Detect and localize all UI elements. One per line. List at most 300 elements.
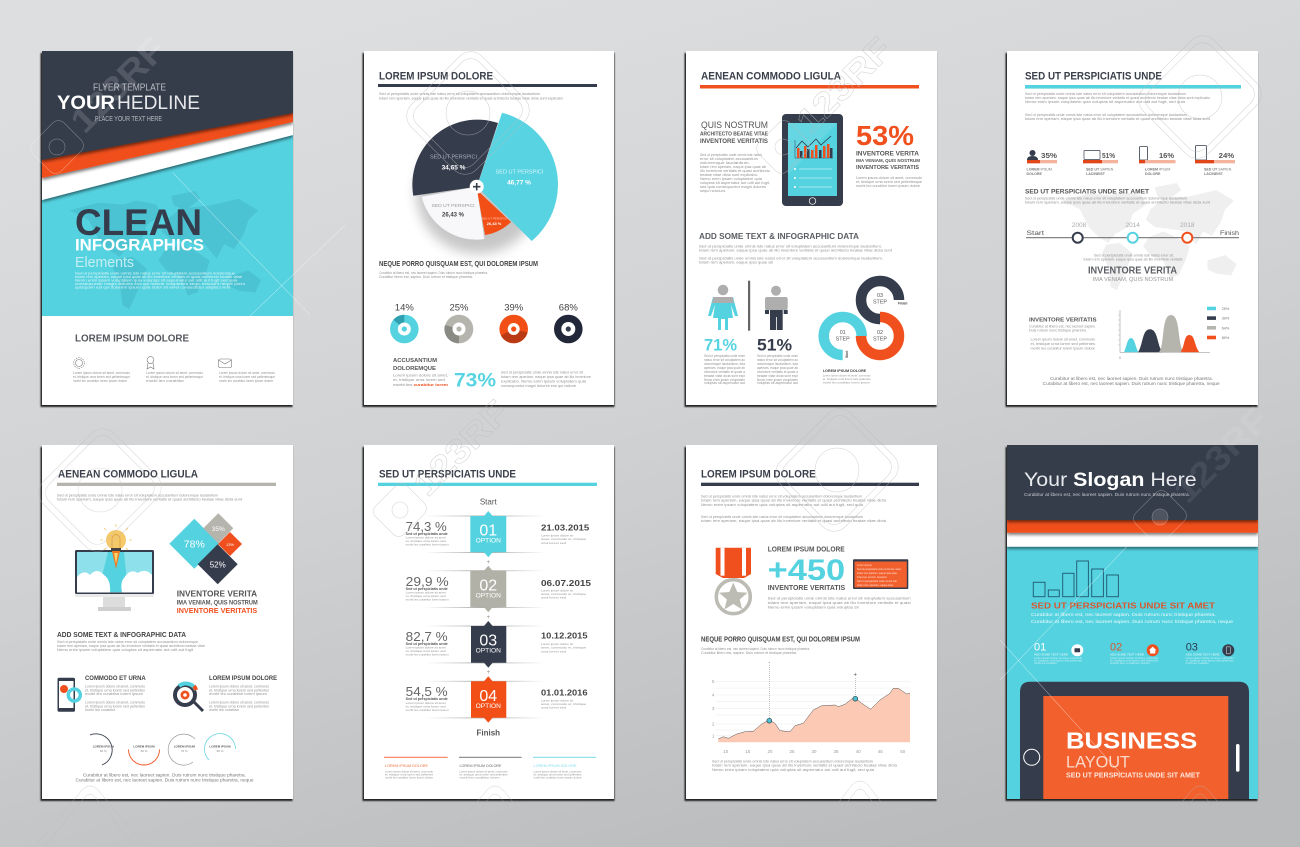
connector plus: +	[487, 670, 491, 676]
option 01 row: OPTION	[476, 538, 501, 545]
51 percent: 51%	[757, 336, 792, 355]
donut 25%: 25%	[449, 303, 469, 314]
step 01: morbi leo curabitur	[1034, 662, 1057, 665]
left copy: sequi nesciunt.	[700, 189, 726, 193]
watermarks: 123RF	[789, 30, 900, 141]
timeline caption: Sed ut perspiciatis unde omnis iste natus error sit,	[1094, 254, 1174, 258]
steps caption: LOREM IPSUM DOLORE	[823, 369, 867, 373]
world map	[1062, 183, 1237, 290]
donut 14%	[390, 303, 419, 343]
footer columns text: et, tristique uma lorem sed pellentesque	[146, 375, 203, 379]
accusantium block: Lorem ipsum dolore sit amet,	[393, 374, 448, 378]
right copy: INVENTORE VERITATIS	[856, 165, 919, 171]
icon: laptop screen: totam rem aperiam, eaque ipsa	[857, 583, 894, 587]
panel: tablet and steps page	[686, 51, 937, 405]
option 01 row: Lorem ipsum dolore sit amet	[406, 536, 446, 540]
left copy: sed quia consequuntur magni dolores	[700, 185, 766, 189]
intro text	[75, 272, 245, 290]
commodo block: COMMODO ET URNA	[85, 676, 146, 682]
option 01 row: et, tristique urna lorem sed	[406, 539, 446, 543]
option 01 row: Sed ut perspiciatis unde	[406, 532, 448, 536]
watermarks: 123RF	[1166, 400, 1277, 511]
option 04 row: uma lorem sed	[541, 706, 566, 710]
area line chart: 4	[712, 692, 715, 698]
chart copy: Lorem ipsum dolore sit amet, commodo	[1030, 338, 1095, 342]
accusantium block: DOLOREMQUE	[393, 366, 436, 372]
footer text: Curabitur at libero est, nec laoreet sapien. Duis rutrum nunc tristique pharetra, neque	[76, 778, 254, 782]
intro text: Sed ut perspiciatis unde omnis iste natus error sit voluptatem accusantium doloremque laudantium	[1025, 92, 1186, 96]
accusantium right text: totam rem aperiam, eaque ipsa quae ab illo inventore	[501, 375, 591, 379]
right copy: INVENTORE VERITA	[856, 151, 919, 158]
stat: tablet 24%	[1195, 146, 1235, 176]
icon: male figure	[765, 286, 788, 330]
right copy: IMA VENIAM, QUIS NOSTRUM	[856, 158, 920, 163]
area line chart	[712, 660, 910, 754]
71 percent: 71%	[704, 336, 737, 355]
option 01 row: morbi leo curabitur lorem ipsum	[406, 543, 449, 547]
footer column: orange: Lorem ipsum dolore sit amet, commodo	[385, 770, 433, 774]
timeline caption	[1084, 254, 1183, 283]
heading: SED UT PERSPICIATIS UNDE	[1025, 70, 1162, 82]
option 04 row: Lorem ipsum dolore sit	[541, 698, 573, 702]
73 percent: 73%	[454, 371, 496, 392]
figure captions: doloremque laudantium, tota	[704, 362, 745, 366]
footer column: gray: Lorem ipsum dolore sit amet, commodo	[460, 770, 508, 774]
intro text: totam rem aperiam, eaque ipsa quae ab illo inventore veritatis et quasi architecto beatae vitae	[75, 275, 242, 279]
section text	[57, 640, 205, 652]
step 02: ADD SOME TEXT HERE	[1110, 652, 1144, 656]
option 04 row	[406, 676, 588, 723]
tagline: PLACE YOUR TEXT HERE	[95, 116, 162, 123]
icon: laptop screen: Sed ut perspiciatis unde omnis iste	[857, 579, 898, 583]
option 02 row: 06.07.2015	[541, 579, 592, 588]
icon: laptop screen	[853, 559, 908, 589]
icon: laptop screen: Nemo enim ipsam	[857, 575, 887, 579]
left copy: QUIS NOSTRUM	[701, 120, 768, 130]
right copy: morbi leo curabitur lorem ipsum dolore	[856, 184, 920, 188]
icon: medal	[716, 548, 751, 614]
chart legend: 25%	[1222, 307, 1230, 311]
footer text: Curabitur at libero est, nec laoreet sapien. Duis rutrum nunc tristique pharetra.	[83, 772, 246, 778]
figure captions: natus error sit voluptatem ac	[704, 358, 745, 362]
elements subtitle: Elements	[75, 254, 134, 271]
option 03 row: Sed ut perspiciatis unde	[406, 642, 448, 646]
icon: laptop screen: totam rem aperiam, eaque ipsa quae	[857, 571, 898, 575]
heading: AENEAN COMMODO LIGULA	[701, 70, 841, 82]
subheading: SED UT PERSPICIATIS UNDE SIT AMET	[1031, 600, 1216, 610]
orange stripe	[1007, 515, 1258, 533]
footer columns text: morbi leo curabitur lorem ipsum dolore	[73, 379, 127, 383]
footer column: orange: et, tristique urna lorem sed pellentes	[385, 772, 434, 776]
left copy	[700, 120, 770, 193]
start label: Start	[480, 497, 498, 506]
stat: person 35%: 35%	[1041, 153, 1058, 160]
panel: timeline page	[1007, 51, 1258, 405]
chart copy: INVENTORE VERITATIS	[1029, 318, 1097, 324]
panel: options timeline page	[364, 445, 614, 799]
commodo block: morbi leo curabitur lorem ipsum	[85, 692, 143, 696]
step 02: 02	[1110, 642, 1122, 654]
lorem block: et, tristique urna lorem sed pellentes	[209, 688, 269, 692]
watermarks: 123RF	[63, 30, 174, 141]
area line chart: 45	[878, 749, 883, 754]
option 02 row: Lorem ipsum dolore sit amet	[406, 590, 446, 594]
option 04 row: 54,5 %	[406, 684, 448, 699]
step 03: Lorem ipsum dolore sit amet, commodo	[1186, 657, 1234, 660]
footer columns text	[73, 371, 275, 383]
intro text: totam rem aperiam, eaque ipsa quae ab illo inventore veritatis et quasi architecto beatae vitae dicta sunt	[57, 498, 242, 502]
timeline: 2018	[1180, 222, 1195, 229]
timeline caption: totam rem aperiam, eaque ipsa quae ab illo inventore veritatis	[1084, 258, 1183, 262]
figure captions: voluptas sit aspernatur aut	[704, 381, 745, 385]
business title: BUSINESS	[1066, 727, 1197, 753]
progress arc 1: LOREM IPSUM	[93, 744, 114, 748]
subheading text: Curabitur at libero est, nec laoreet sapien. Duis rutrum nunc tristique pharetra.	[701, 647, 810, 651]
steps caption: Lorem ipsum dolore sit amet, commodo	[823, 374, 871, 378]
section heading: ADD SOME TEXT & INFOGRAPHIC DATA	[699, 232, 859, 241]
intro text: totam rem aperiam, eaque ipsa quae ab illo inventore veritatis et quasi architecto beatae vitae dicta sunt explicabo	[379, 96, 563, 100]
subheading: SED UT PERSPICIATIS UNDE SIT AMET	[1025, 188, 1149, 195]
intro text: Sed ut perspiciatis unde omnis iste natus error sit voluptatem accusantium doloremque laudantium	[1025, 113, 1187, 117]
icon: laptop screen: Sed ut perspiciatis unde omnis iste natus	[857, 567, 902, 571]
headline: HEDLINE	[117, 93, 200, 114]
bell area chart: 0	[1119, 356, 1121, 360]
steps caption: morbi leo curabitur lorem ipsum	[823, 380, 870, 384]
diamond chart	[169, 513, 242, 584]
figure captions: aperiam, eaque ipsa quae ab	[704, 366, 745, 370]
step 01: 01	[1034, 642, 1046, 654]
intro text	[701, 494, 886, 523]
step rings: Finish	[898, 302, 907, 306]
diamond chart: 52%	[210, 560, 226, 570]
chart copy: Curabitur at libero est, nec laoreet sapien.	[1029, 324, 1096, 328]
chart copy: Duis rutrum nunc tristique pharetra.	[1029, 328, 1087, 332]
left copy: totam rem aperiam, eaque ipsa quae ab	[700, 165, 766, 169]
step 01	[1034, 642, 1083, 665]
stat: tablet 24%: LACINEIST	[1204, 172, 1224, 176]
heading rule	[701, 483, 919, 486]
timeline caption: INVENTORE VERITA	[1088, 265, 1177, 276]
progress arc 3	[168, 734, 195, 765]
timeline: Start	[1026, 230, 1044, 237]
business subtitle: SED UT PERSPICIATIS UNDE SIT AMET	[1066, 773, 1201, 780]
infographics subtitle: INFOGRAPHICS	[75, 236, 204, 254]
step rings: Start	[845, 350, 849, 358]
finish label: Finish	[477, 728, 500, 737]
right copy: et, tristique urna lorem sed pellentesque	[856, 180, 922, 184]
lorem block: et, tristique urna lorem sed pellentes	[209, 704, 269, 708]
footer column: teal: Lorem ipsum dolore sit amet, commodo	[534, 770, 582, 774]
step rings: 03	[877, 293, 883, 299]
medal text: totam rem aperiam, eaque ipsa quae ab illo inventore veritatis et quasi	[768, 601, 911, 605]
progress arc 1: 84 %	[100, 749, 107, 753]
navy header	[42, 51, 293, 160]
option 03 row: OPTION	[476, 648, 501, 655]
step 02: morbi leo curabitur lorem	[1110, 662, 1150, 665]
icon: tablet with chart	[782, 114, 843, 206]
area line chart: +	[854, 672, 858, 678]
option 03 row: 10.12.2015	[541, 632, 588, 640]
chart text: Nemo enim ipsam voluptatem quia voluptas sit aspernatur aut odit aut fugit, sed quia	[712, 768, 874, 772]
intro text: Sed ut perspiciatis unde omnis iste natus error sit voluptatem accusantium doloremque	[75, 272, 235, 276]
watermarks: 123RF	[406, 393, 517, 504]
pie chart: SED UT PERSPICI	[481, 216, 507, 220]
option 02 row: et, tristique urna lorem sed	[406, 594, 446, 598]
pie chart: 26,43 %	[487, 221, 502, 226]
step rings: STEP	[873, 300, 887, 306]
option 01 row: 74,3 %	[406, 519, 447, 534]
step 01: et, tristique urna lorem sed pellentes	[1034, 660, 1083, 662]
option 03 row: et, tristique urna lorem sed	[406, 649, 446, 653]
footer column: gray	[459, 757, 522, 780]
layout title: LAYOUT	[1066, 752, 1130, 771]
lorem block: Lorem ipsum dolore sit amet, commodo	[209, 700, 269, 704]
commodo block	[85, 676, 146, 712]
figure captions: Sed ut perspiciatis unde omni	[757, 354, 798, 358]
option 02 row: uma lorem sed	[541, 596, 566, 600]
intro text: consequuntur magni dolores eos qui ratione voluptatem sequi nesciunt neque porro	[75, 282, 245, 286]
subheading text: Sed ut perspiciatis unde omnis iste natus error sit voluptatem accusantium doloremque laudantium	[1025, 196, 1187, 200]
medal text: Nemo enim ipsam voluptatem quia voluptas sit	[768, 606, 859, 610]
step 02: Lorem ipsum dolore sit amet, commodo	[1110, 657, 1159, 660]
stat: laptop 51%: SED UT SAPIEN	[1086, 168, 1114, 172]
donut 25%	[444, 303, 473, 343]
area line chart: 5	[712, 679, 715, 684]
chart legend	[1207, 307, 1230, 340]
footer column: gray: et, tristique urna lorem sed pellentes	[460, 772, 508, 776]
option 03 row: morbi leo curabitur lorem ipsum	[406, 653, 449, 657]
lorem block: LOREM IPSUM DOLORE	[209, 676, 277, 682]
stat: person 35%: DOLORE	[1026, 172, 1042, 176]
section heading: ADD SOME TEXT & INFOGRAPHIC DATA	[57, 632, 186, 639]
pie chart: 46,77 %	[507, 180, 531, 186]
option 04 row: et, tristique urna lorem sed	[406, 704, 446, 708]
intro text: Nemo enim ipsam voluptatem quia voluptas sit aspernatur aut odit aut fugit sed quia	[75, 278, 237, 282]
intro text: Sed ut perspiciatis unde omnis iste natus error sit voluptatem accusantium doloremque laudantium	[701, 515, 863, 519]
area line chart: 35	[834, 749, 839, 754]
icon: award	[147, 357, 154, 369]
option 04 row: amet, commodo et, tristique	[541, 702, 586, 706]
stat: person 35%: LOREM IPSUM	[1026, 168, 1052, 172]
diamond caption	[177, 589, 258, 615]
option 01 row: Lorem ipsum dolore sit	[541, 534, 573, 538]
area line chart: 25	[790, 749, 795, 754]
intro text: totam rem aperiam, eaque ipsa quae ab illo inventore veritatis et quasi architecto beatae vitae dicta	[701, 499, 886, 503]
accusantium block: ACCUSANTIUM	[393, 358, 437, 364]
timeline caption: IMA VENIAM, QUIS NOSTRUM	[1093, 277, 1174, 283]
option 04 row: morbi leo curabitur lorem ipsum	[406, 708, 449, 712]
medal text: Sed ut perspiciatis unde omnis iste natus error sit voluptatem accusantium	[768, 596, 911, 600]
progress arc 2: 50 %	[141, 749, 148, 753]
footer column: teal: et, tristique urna lorem sed pellentes	[534, 772, 582, 776]
footer column: gray: morbi leo curabitur lorem	[460, 776, 500, 780]
option 03 row: uma lorem sed	[541, 649, 566, 653]
teal background	[42, 120, 293, 316]
diamond caption: INVENTORE VERITATIS	[177, 606, 257, 615]
footer column: teal	[533, 757, 596, 780]
section text: totam rem aperiam, eaque ipsa quae ab	[699, 260, 773, 264]
figure captions: voluptas sit aspernatur aut	[757, 381, 798, 385]
timeline: Finish	[1220, 230, 1239, 237]
section text: totam rem aperiam, eaque ipsa quae ab illo inventore veritatis et quasi architecto beatae vitae dicta sunt	[699, 248, 892, 252]
accusantium right text: consequuntur magni dolores eos qui ratione	[501, 384, 576, 388]
subheading: NEQUE PORRO QUISQUAM EST, QUI DOLOREM IPSUM	[701, 635, 860, 644]
donut 68%	[554, 303, 583, 343]
donut 68%: 68%	[559, 303, 578, 314]
left copy: illo inventore veritatis et quasi architecto	[700, 169, 770, 173]
option 04 row: Sed ut perspiciatis unde	[406, 697, 448, 701]
subheading text: Curabitur libero est, sapien. Duis rutrum et tristique pharetra.	[379, 275, 473, 279]
timeline: 2014	[1125, 222, 1140, 229]
chart legend: 39%	[1222, 316, 1230, 320]
diamond chart: 78%	[184, 538, 205, 550]
footer column: orange	[384, 757, 448, 780]
subheading text: totam rem aperiam, eaque ipsa quae ab illo inventore veritatis et quasi architecto beatae vitae dicta sunt	[1025, 200, 1210, 204]
stat: laptop 51%: 51%	[1102, 153, 1116, 160]
footer column: orange: LOREM IPSUM DOLORE	[385, 764, 429, 768]
step rings: 01	[840, 330, 846, 336]
left copy: INVENTORE VERITATIS	[700, 139, 768, 145]
clean title: CLEAN	[75, 202, 202, 243]
area line chart: -	[768, 660, 770, 666]
lorem heading: LOREM IPSUM DOLORE	[768, 547, 845, 554]
outline bar chart	[1033, 561, 1118, 597]
steps caption	[823, 369, 871, 384]
pie chart: SED UT PERSPICI	[496, 170, 544, 176]
steps caption: et, tristique urna lorem sed pellentes	[823, 377, 871, 381]
figure captions: inventore veritatis et quasi a	[704, 370, 745, 374]
icon: envelope	[218, 359, 232, 368]
footer column: teal: LOREM IPSUM DOLORE	[534, 764, 577, 768]
step 03: et, tristique urna lorem sed pellentes	[1186, 660, 1235, 662]
area line chart: 1	[712, 734, 715, 738]
progress arc 1	[90, 734, 114, 765]
chart text: totam rem aperiam, eaque ipsa quae ab illo inventore veritatis et quasi architecto beatae vitae dicta	[712, 764, 897, 768]
subheading text: Curabitur at libero est, nec laoreet sapien. Duis rutrum nunc tristique pharetra.	[379, 271, 488, 275]
connector plus: +	[487, 560, 491, 566]
option 04 row: 04	[479, 688, 497, 705]
area line chart: 10	[723, 749, 729, 754]
option 02 row	[406, 566, 592, 612]
section text: Sed ut perspiciatis unde omnis iste natus error sit voluptatem accusantium doloremque laudantium,	[699, 244, 882, 248]
heading rule	[1025, 85, 1241, 89]
panel: pie chart page	[364, 51, 614, 405]
stat: phone 16%	[1139, 146, 1176, 176]
world map	[69, 191, 261, 309]
accusantium right text	[501, 370, 591, 388]
stat: phone 16%: 16%	[1159, 153, 1175, 160]
icon: gear	[74, 358, 84, 368]
option 02 row: 29,9 %	[406, 574, 449, 589]
chart copy: morbi leo curabitur lorem ipsum dolore	[1030, 346, 1095, 350]
icon: laptop screen: Lorem ipsum	[857, 563, 872, 567]
heading: SED UT PERSPICIATIS UNDE	[379, 468, 516, 480]
lorem block: morbi leo curabitur	[209, 708, 240, 712]
footer columns text: et, tristique uma lorem sed pellentesque	[219, 375, 275, 379]
option 04 row: OPTION	[476, 703, 501, 710]
subheading text	[701, 647, 810, 655]
headline: YOUR	[57, 93, 115, 114]
progress arc 4: LOREM IPSUM	[209, 744, 231, 748]
heading rule	[700, 85, 919, 88]
area line chart: 2	[712, 722, 715, 726]
intro text: Sed ut perspiciatis unde omnis iste natus error sit voluptatem accusantium doloremque laudantium	[701, 494, 862, 498]
option 01 row: amet, commodo et, tristique	[541, 537, 586, 541]
heading rule	[378, 483, 597, 486]
subheading text	[1031, 612, 1234, 624]
pie chart: 34,65 %	[442, 164, 466, 172]
section text: Sed ut perspiciatis unde omnis iste natus error sit voluptatem accusantium doloremque	[57, 640, 198, 644]
stat: laptop 51%	[1083, 150, 1118, 176]
icon: female figure	[708, 285, 738, 330]
progress arc 2: LOREM IPSUM	[133, 744, 155, 748]
pie chart: 26,43 %	[442, 212, 465, 218]
step 03	[1186, 642, 1235, 665]
step 02: et, tristique urna lorem sed pellentes	[1110, 660, 1159, 662]
option 02 row: OPTION	[476, 592, 501, 599]
step rings: STEP	[873, 336, 887, 342]
pie chart	[412, 113, 558, 254]
decorative white diagonals	[173, 173, 1127, 775]
footer columns text: Lorem ipsum dolore sit amet, commodo	[219, 371, 275, 375]
slogan subtext: Curabitur at libero est, nec laoreet sapien. Duis rutrum nunc tristique pharetra.	[1024, 492, 1190, 497]
footer columns text: Lorem ipsum dolore sit amet, commodo	[73, 371, 130, 375]
subheading text: Curabitur at libero est, nec laoreet sapien. Duis rutrum nunc tristique pharetra.	[1031, 612, 1216, 617]
flyer template text: FLYER TEMPLATE	[93, 82, 166, 94]
footer column: gray: LOREM IPSUM DOLORE	[460, 764, 502, 768]
footer text: Curabitur at libero est, nec laoreet sapien. Duis rutrum nunc tristique pharetra.	[1050, 376, 1213, 381]
lorem block: Lorem ipsum dolore sit amet, commodo	[209, 684, 269, 688]
progress arc 3: LOREM IPSUM	[174, 744, 195, 748]
option 01 row: uma lorem sed	[541, 541, 566, 545]
bell area chart	[1118, 310, 1210, 360]
step 03: 03	[1186, 642, 1198, 654]
figure captions: Nemo enim ipsam voluptatem	[757, 378, 798, 382]
slogan: Your Slogan Here	[1024, 469, 1197, 491]
intro text: Sed ut perspiciatis unde omnis iste natus error sit voluptatem accusantium doloremque laudantium	[57, 494, 218, 498]
commodo block: Lorem ipsum dolore sit amet, commodo	[85, 684, 145, 688]
figure captions: Nemo enim ipsam voluptatem	[704, 378, 745, 382]
inventore heading: INVENTORE VERITATIS	[768, 585, 846, 592]
option 03 row: 03	[479, 633, 497, 650]
accusantium block: morbi leo curabitur lorem	[393, 382, 449, 387]
intro text: Sed ut perspiciatis unde omnis iste natus error sit voluptatem accusantium doloremque laudantium	[379, 92, 540, 96]
option 02 row: amet, commodo et, tristique	[541, 592, 586, 596]
icon: phone with gears	[58, 678, 80, 712]
heading: LOREM IPSUM DOLORE	[701, 468, 816, 480]
footer column: orange: morbi leo curabitur lorem ipsum dolore	[385, 776, 433, 780]
left copy: error sit voluptatem accusantium	[700, 157, 758, 161]
step rings: STEP	[836, 336, 850, 342]
option 03 row: 82,7 %	[406, 629, 448, 644]
left copy: voluptas sit aspernatur aut odit aut fugit,	[700, 181, 770, 185]
option 03 row: amet, commodo et, tristique	[541, 646, 586, 650]
figure captions: beatae vitae dicta sunt expl	[757, 374, 798, 378]
option 03 row: Lorem ipsum dolore sit amet	[406, 646, 446, 650]
option 02 row: Lorem ipsum dolore sit	[541, 588, 573, 592]
figure captions	[704, 354, 798, 385]
diamond chart: 13%	[226, 542, 234, 547]
commodo block: morbi leo curabitur	[85, 708, 116, 712]
progress arc 2	[128, 744, 160, 765]
heading rule	[57, 483, 276, 486]
step 03: ADD SOME TEXT HERE	[1186, 652, 1220, 656]
progress arc 3: 76 %	[181, 749, 188, 753]
chart legend: 89%	[1222, 336, 1230, 340]
area line chart: 50	[900, 749, 906, 754]
option 02 row: Sed ut perspiciatis unde	[406, 587, 448, 591]
heading rule	[378, 84, 597, 87]
